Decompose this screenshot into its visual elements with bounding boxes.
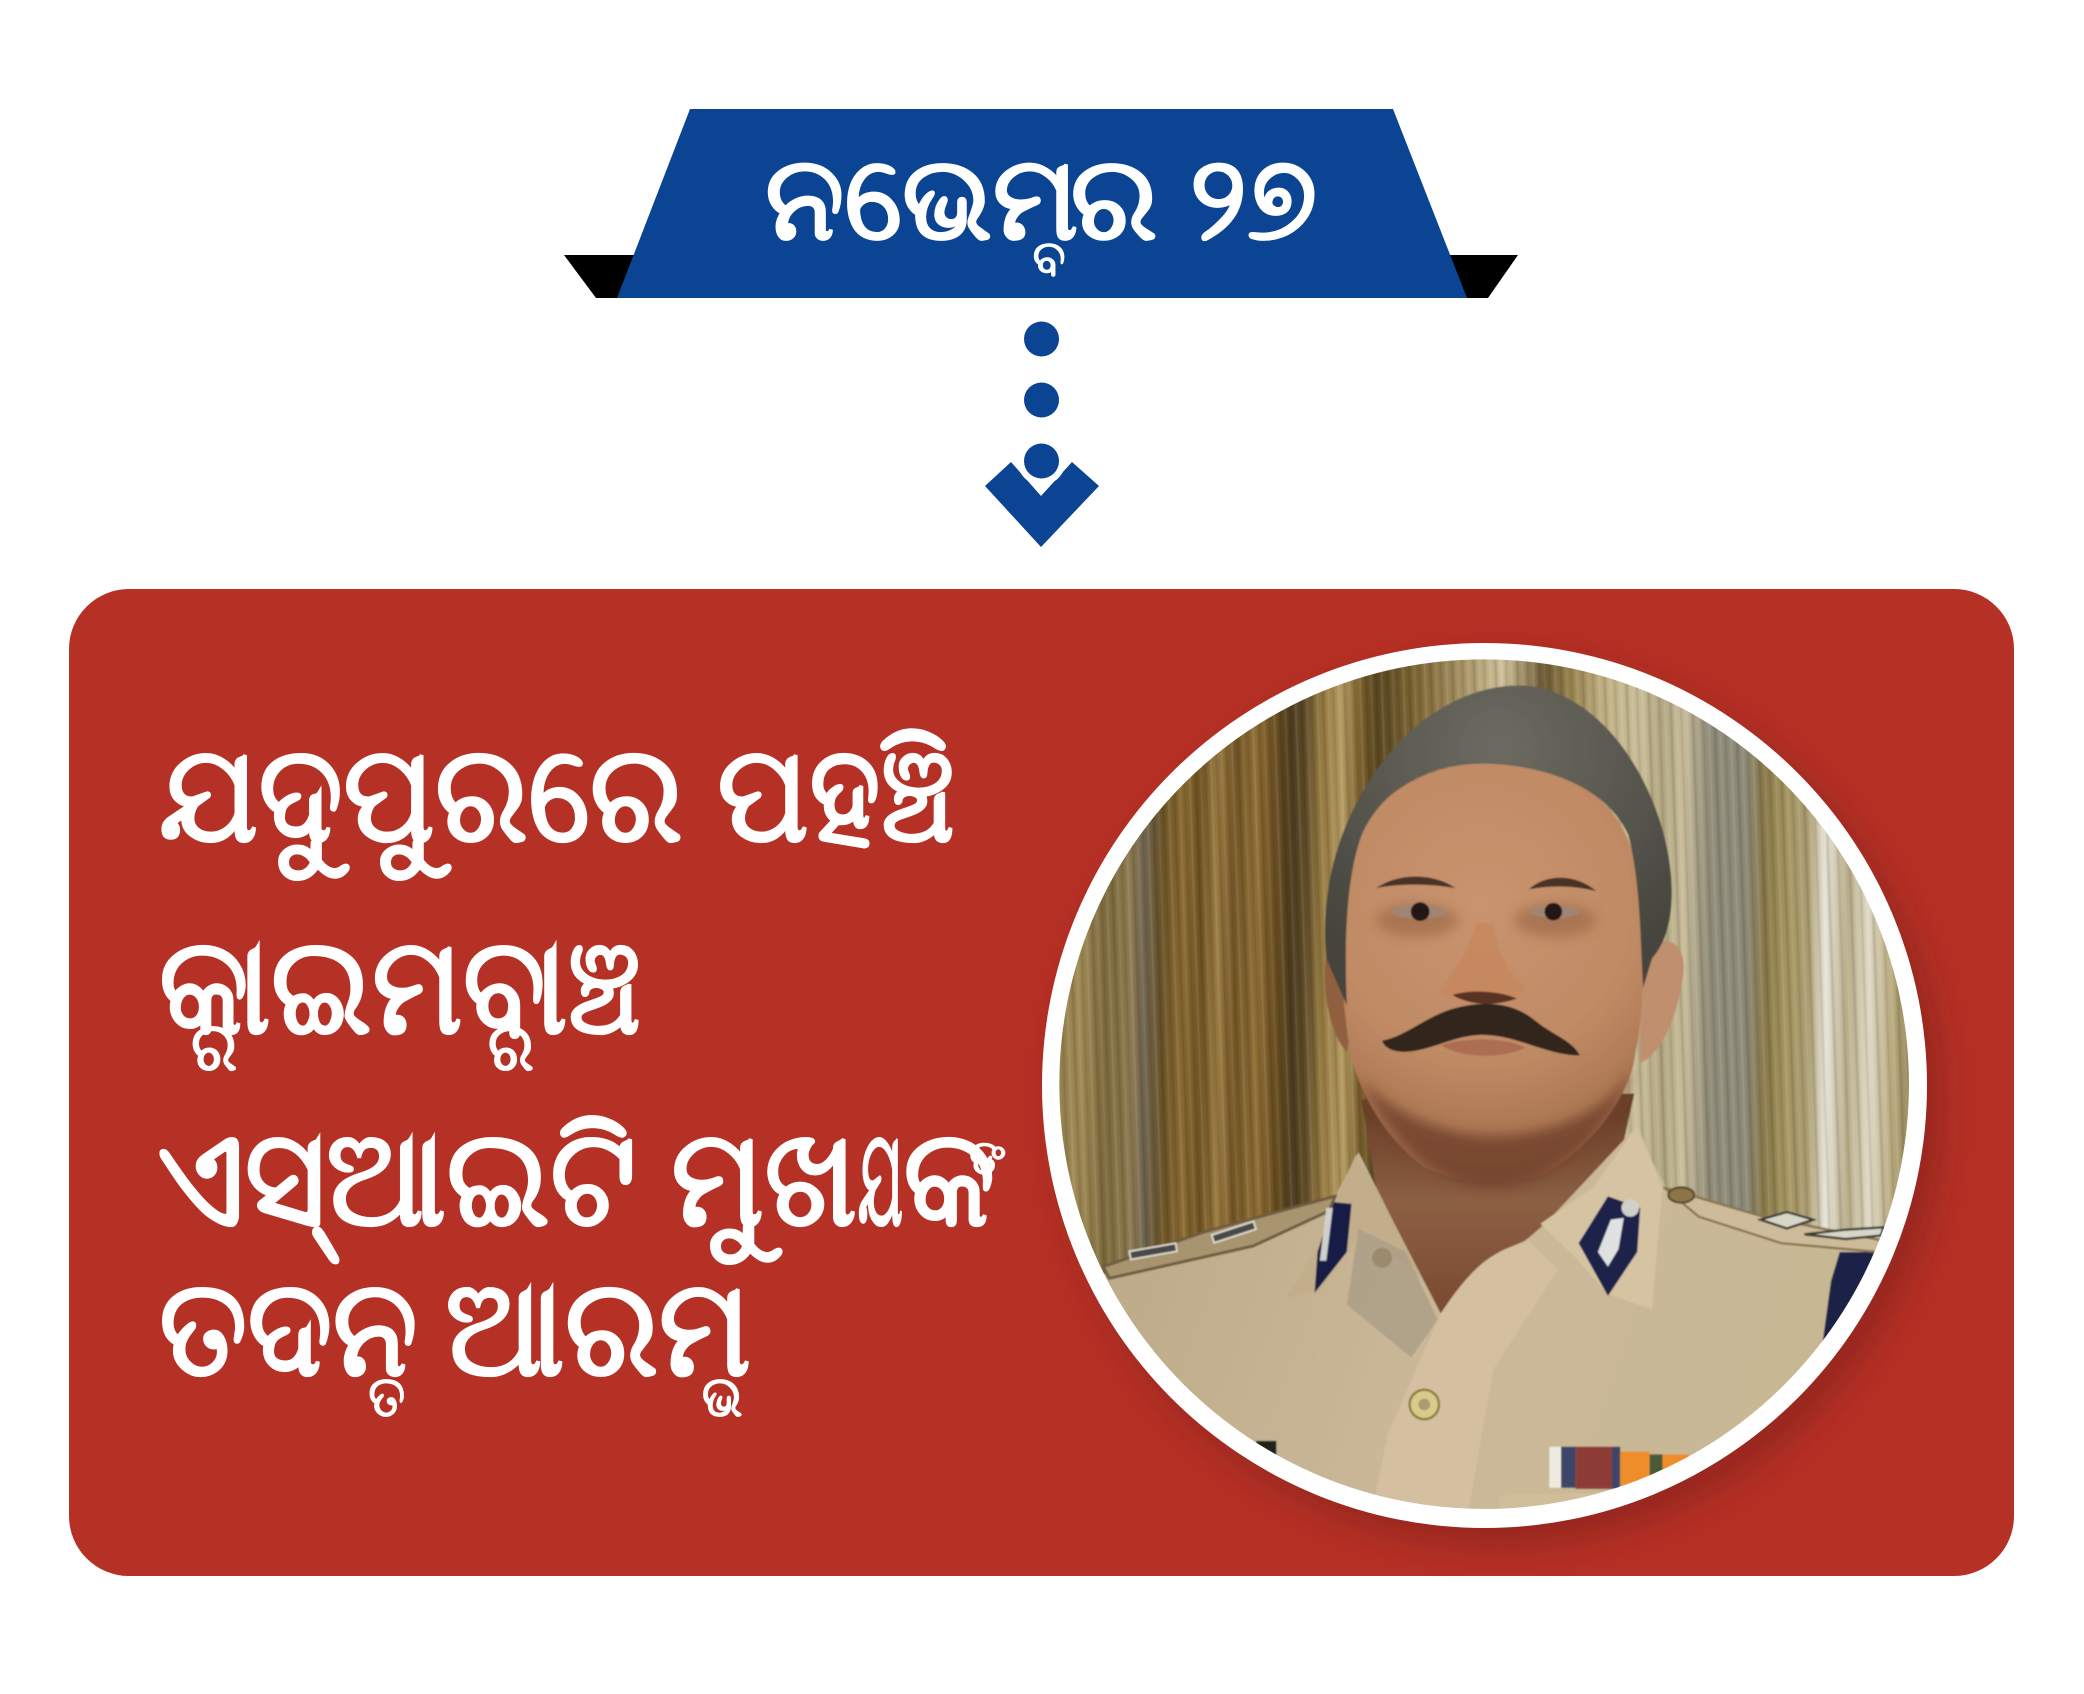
right patch emblem — [1598, 1218, 1624, 1267]
dark sleeve trim — [1822, 1252, 1875, 1346]
left eyebrow — [1376, 876, 1455, 888]
face — [1342, 764, 1643, 1182]
left eye socket shadow — [1376, 904, 1458, 937]
shirt body — [1104, 1132, 1861, 1509]
strap button — [1668, 1187, 1694, 1203]
headline line 4: ତଦନ୍ତ ଆରମ୍ଭ — [159, 1252, 751, 1429]
pocket — [1499, 1492, 1617, 1550]
headline line 2: କ୍ର ାଇମବ୍ର ାଞ୍ଚ — [159, 910, 641, 1085]
neck — [1362, 1094, 1634, 1316]
banner fold right — [1430, 255, 1518, 298]
right collar patch — [1579, 1196, 1640, 1296]
right eye socket shadow — [1514, 904, 1596, 937]
medal ribbon — [1549, 1447, 1689, 1489]
lips — [1441, 1040, 1526, 1056]
left ear — [1324, 958, 1349, 1052]
moustache — [1382, 1004, 1580, 1055]
portrait ring — [1042, 643, 1927, 1528]
left collar — [1350, 1155, 1420, 1278]
portrait: police officer in uniform — [1059, 659, 1909, 1509]
left eye — [1391, 902, 1445, 921]
right collar — [1540, 1126, 1662, 1309]
banner fold left — [564, 255, 660, 298]
headline line 1: ଯଦୁପୁରରେ ପହଞ୍ଚି — [159, 718, 955, 870]
left patch emblem — [1320, 1208, 1333, 1261]
dark shirt shade — [1347, 1228, 1438, 1358]
right collar pin — [1621, 1199, 1639, 1217]
portrait shadow — [1058, 661, 1942, 1545]
right strap insignia — [1760, 1212, 1884, 1239]
right ear — [1640, 941, 1684, 1063]
collar button — [1372, 1248, 1392, 1268]
headline text — [157, 718, 1006, 1429]
left strap insignia — [1129, 1221, 1256, 1259]
panel: red news card — [69, 589, 2014, 1576]
banner trapezoid — [617, 109, 1467, 298]
headline line 3: ଯ — [857, 1102, 903, 1254]
shirt placket — [1376, 1242, 1556, 1508]
arrow: dots and chevron — [985, 322, 1099, 547]
right eyebrow — [1529, 878, 1596, 891]
nostril shadow — [1452, 991, 1517, 1004]
left shoulder strap — [1103, 1196, 1335, 1278]
left collar patch — [1315, 1202, 1352, 1293]
headline line 3: ଏସ୍‌ଆଇଟି ମୁଖ୍ ଙ୍କ — [157, 1102, 1006, 1254]
banner date text: ନଭେମ୍ବର ୨୭ — [765, 133, 1317, 286]
jaw shadow — [1359, 1064, 1636, 1187]
shirt button — [1410, 1390, 1439, 1419]
right shoulder strap — [1664, 1187, 1881, 1252]
right eye — [1531, 903, 1579, 920]
chest badge — [1256, 1441, 1276, 1458]
curtain background — [1059, 659, 1909, 1314]
hair — [1325, 686, 1672, 1006]
nose — [1443, 924, 1524, 996]
